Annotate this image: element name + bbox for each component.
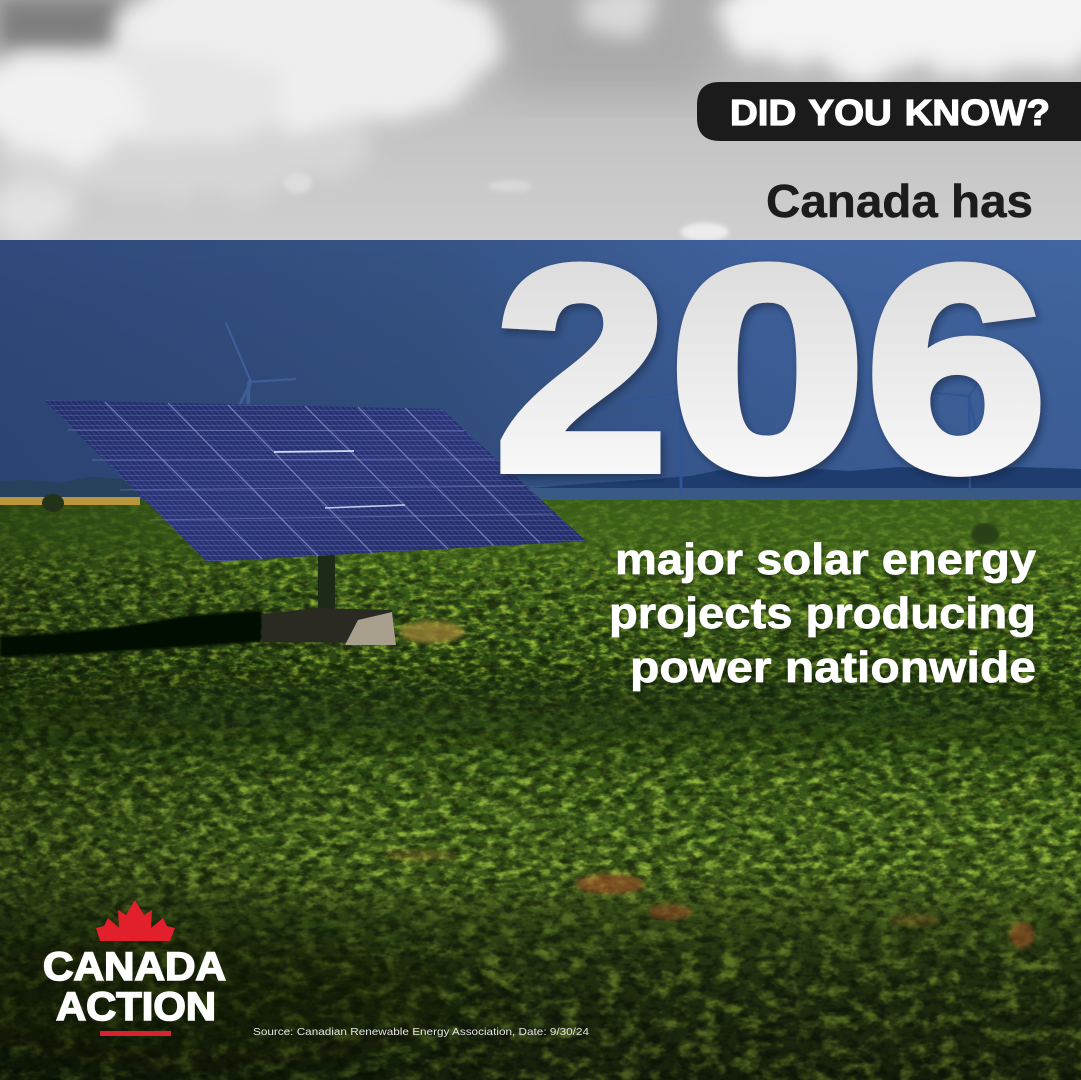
text: major solar energy projects: major solar energy [615,535,1037,584]
distant treeline and horizon [0,467,1081,500]
source note: Source: Canadian Renewable Energy Association, Date: 9/30/24 [253,1026,589,1038]
panel: blue sky band [0,240,1081,502]
badge: did you know [697,82,1081,141]
logo: Canada Action: ACTION [56,985,216,1029]
text: major solar energy projects: projects producing [609,589,1036,638]
big number: 206 [495,206,1047,531]
icon: wind turbine behind panel [226,323,295,405]
big number: 206: 6 [866,207,1047,531]
golden crop strip at horizon [0,494,140,512]
solar panel array on pole [0,400,586,657]
badge: did you know: DID YOU KNOW? [730,92,1050,133]
panel: green soybean field [0,500,1081,1080]
panel: grey cloudy sky [0,0,1081,241]
logo: Canada Action: CANADA [43,945,226,989]
text: Canada has: Canada has [766,175,1033,227]
logo: Canada Action [43,900,226,1036]
icon: wind turbines behind number [620,382,978,495]
text: major solar energy projects [609,535,1037,692]
big number: 206: 2 [495,206,668,531]
text: major solar energy projects: power nationwide [630,643,1036,692]
big number: 206: 0 [669,206,866,531]
